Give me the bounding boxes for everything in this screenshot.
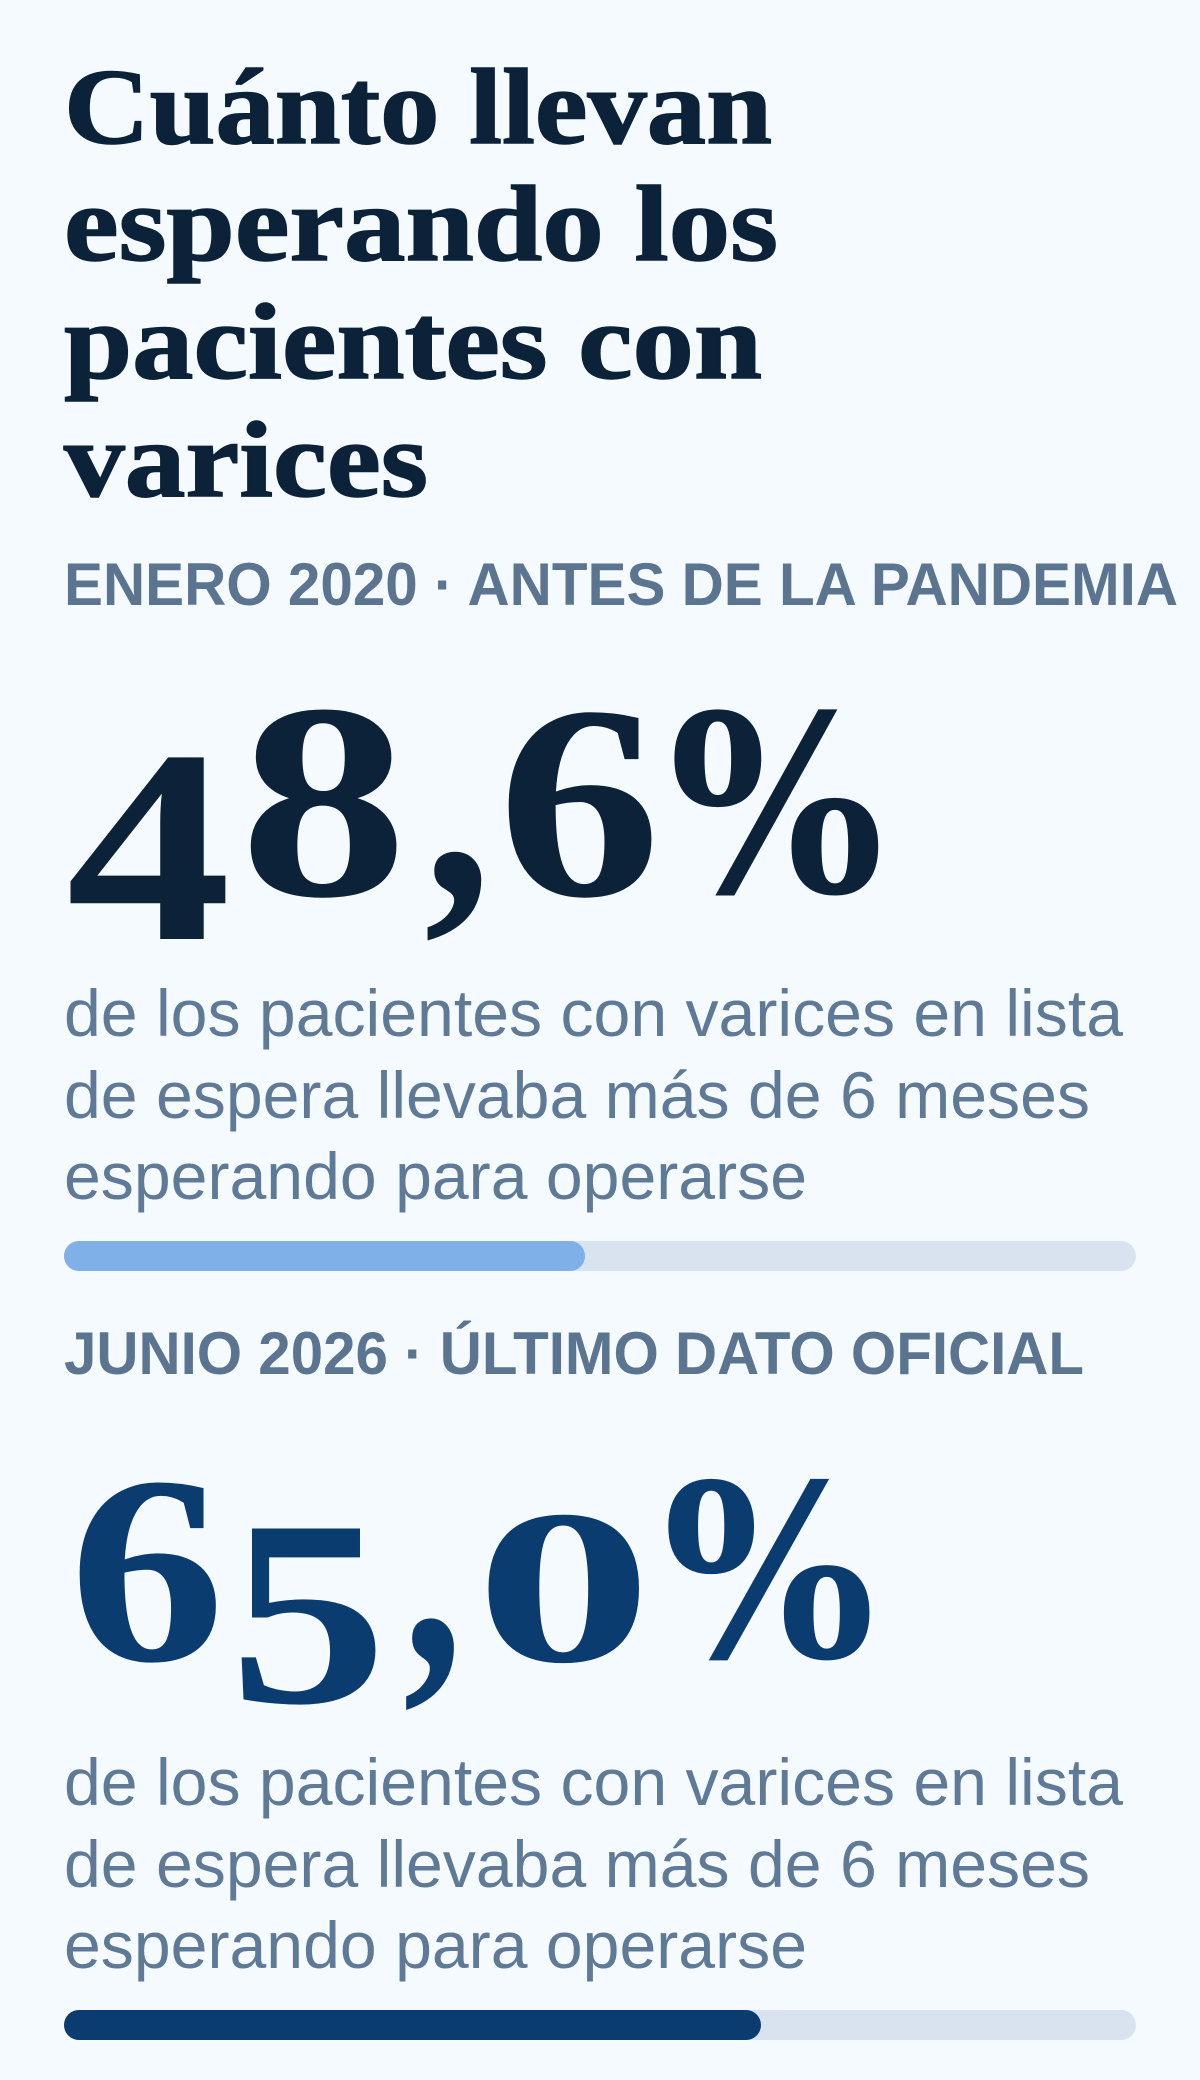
big number: 48,6%: 6	[498, 650, 661, 955]
big number: 65,0%: 5	[229, 1467, 387, 1760]
description: enero 2020	[64, 976, 1123, 1213]
description: enero 2020: de los pacientes con varices en lista	[64, 976, 1123, 1050]
description: junio 2026: de espera llevaba más de 6 meses	[64, 1827, 1090, 1901]
description: enero 2020: de espera llevaba más de 6 meses	[64, 1058, 1090, 1132]
progress bar: 48,6%	[64, 1241, 1136, 1271]
title: Cuánto llevan	[64, 48, 772, 167]
big number: 65,0%	[69, 1393, 875, 1760]
big number: 48,6%: %	[669, 661, 884, 950]
big number: 48,6%	[66, 634, 884, 999]
label: enero 2020: ENERO 2020 · ANTES DE LA PANDEMIA	[64, 551, 1178, 618]
title: esperando los	[64, 165, 778, 284]
description: junio 2026: de los pacientes con varices en lista	[64, 1745, 1123, 1819]
big number: 65,0%: %	[663, 1431, 875, 1714]
panel: junio 2026	[64, 1320, 1136, 2040]
label: junio 2026: JUNIO 2026 · ÚLTIMO DATO OFICIAL	[64, 1320, 1084, 1387]
title: pacientes con	[64, 283, 762, 402]
panel: enero 2020	[64, 551, 1178, 1271]
big number: 65,0%: 0	[475, 1465, 652, 1709]
progress bar: 65,0%	[64, 2010, 1136, 2040]
big number: 48,6%: ,	[424, 634, 491, 960]
description: enero 2020: esperando para operarse	[64, 1139, 807, 1213]
description: junio 2026: esperando para operarse	[64, 1908, 807, 1982]
big number: 48,6%: 4	[66, 693, 232, 999]
title	[64, 48, 778, 520]
title: varices	[64, 401, 428, 520]
big number: 48,6%: 8	[240, 647, 408, 956]
big number: 65,0%: ,	[403, 1393, 463, 1730]
description: junio 2026	[64, 1745, 1123, 1982]
big number: 65,0%: 6	[69, 1421, 225, 1718]
